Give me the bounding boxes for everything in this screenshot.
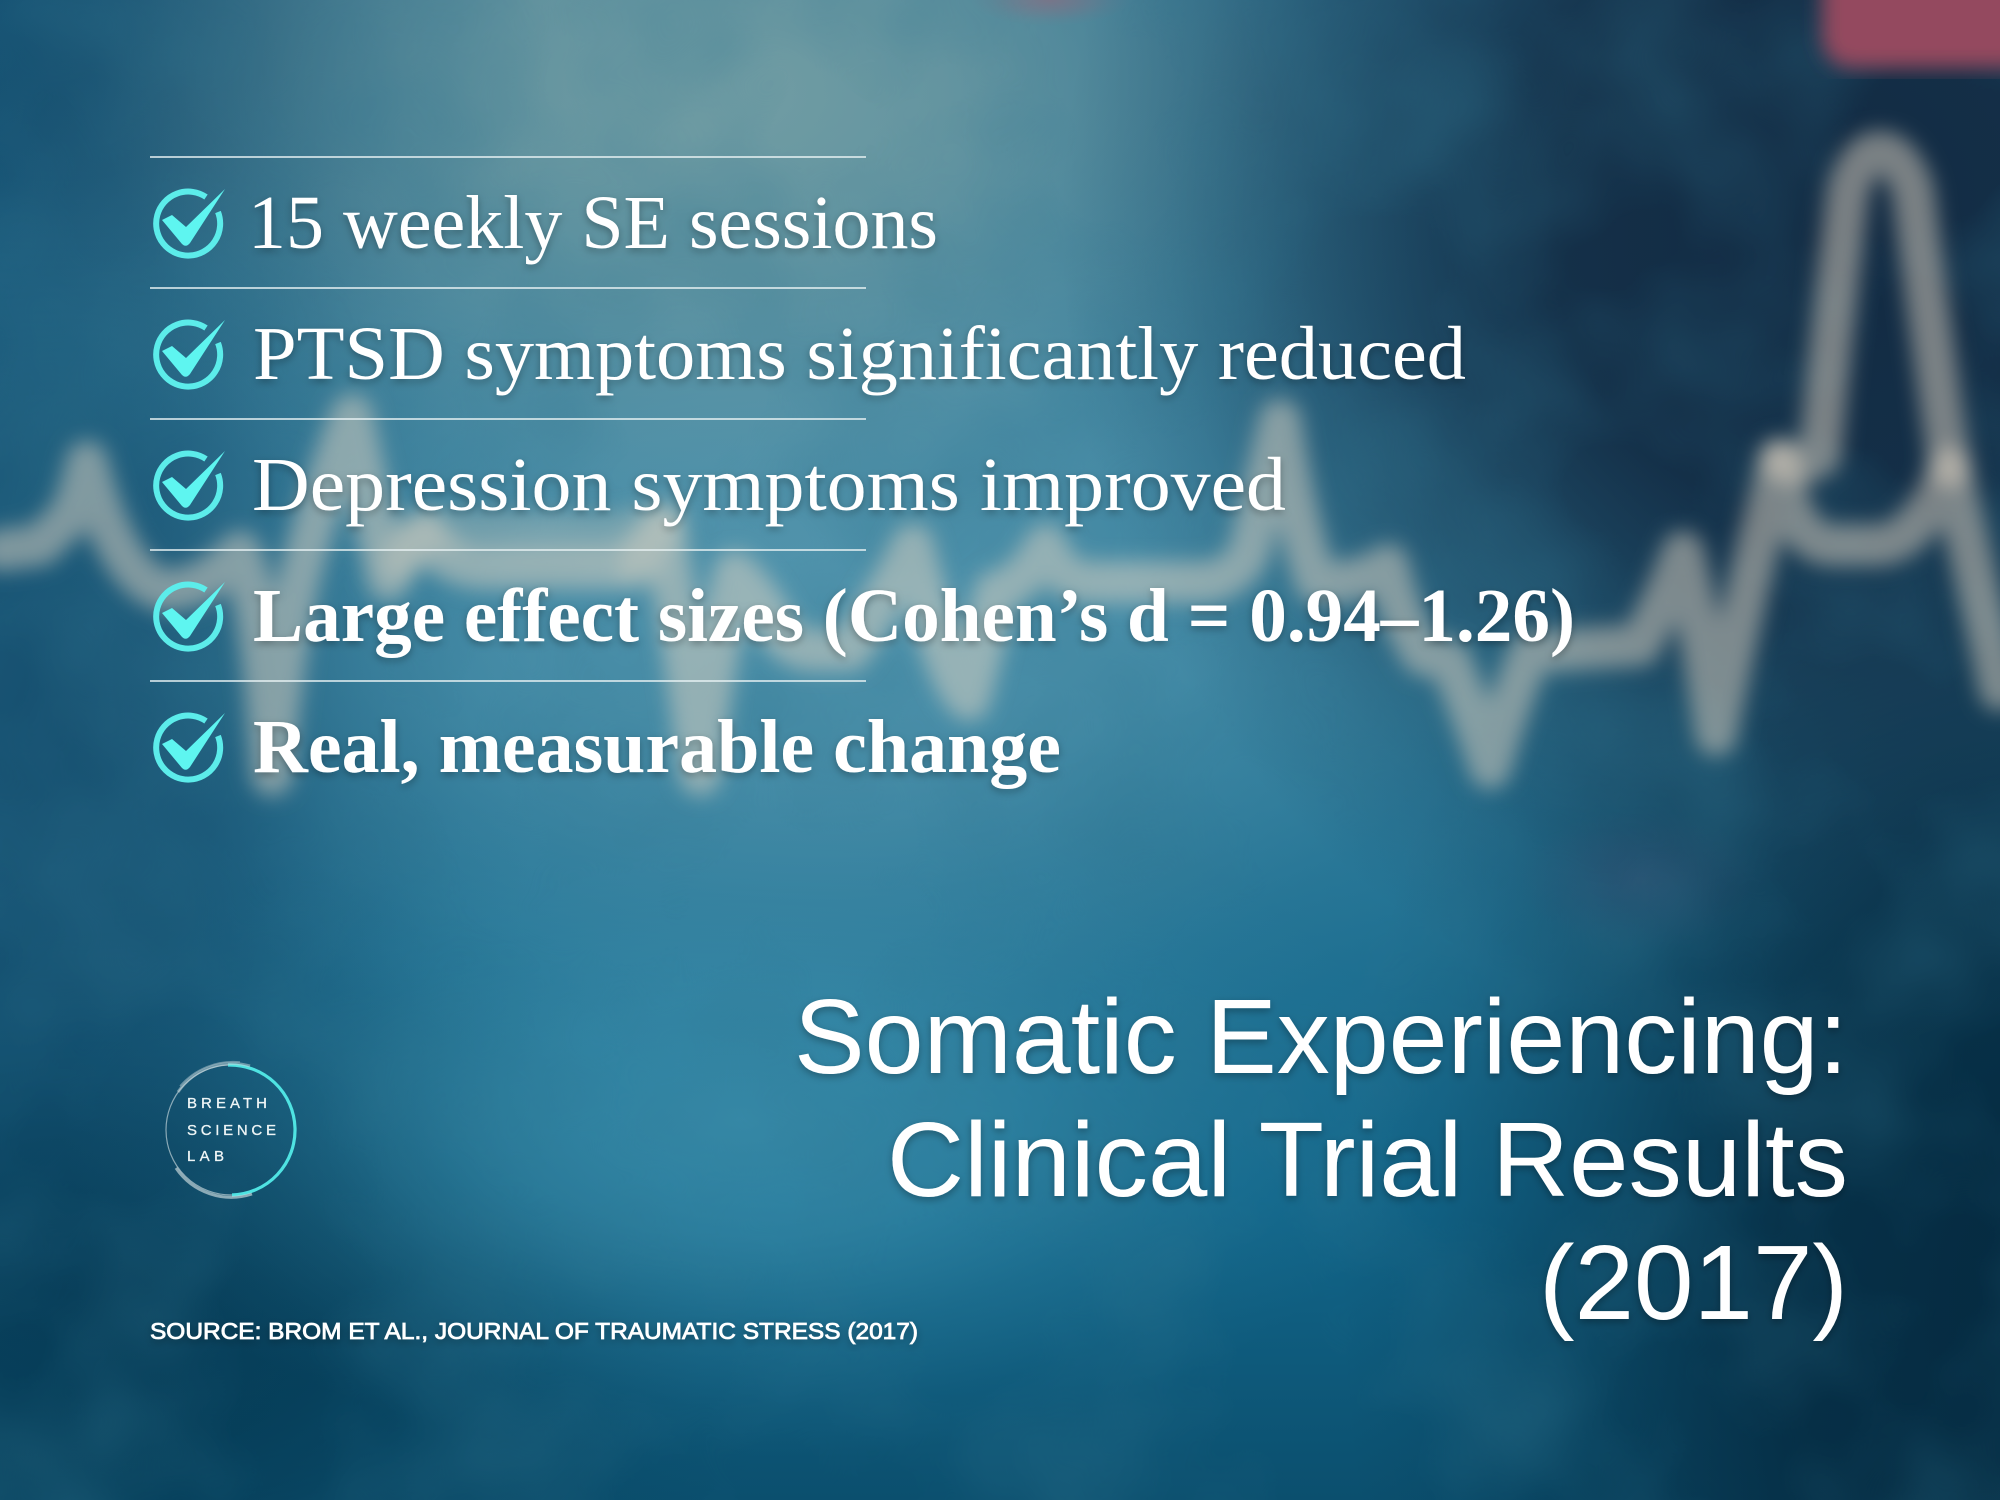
icon: check 5 [156, 713, 225, 780]
checklist [150, 157, 1575, 789]
icon: check 3 [156, 451, 225, 518]
title: Somatic Experiencing: [794, 978, 1848, 1096]
logo: Breath Science Lab [166, 1062, 295, 1197]
item 3: Depression symptoms improved [252, 443, 1286, 527]
title [794, 978, 1848, 1342]
item 1: 15 weekly SE sessions [248, 181, 938, 265]
source line: SOURCE: BROM ET AL., JOURNAL OF TRAUMATIC STRESS (2017) [150, 1318, 918, 1344]
title: Clinical Trial Results [887, 1101, 1848, 1219]
icon: check 1 [156, 189, 225, 256]
icon: check 4 [156, 582, 225, 649]
icon: check 2 [156, 320, 225, 387]
logo: Breath Science Lab: BREATH [187, 1095, 267, 1112]
red monitor indicator [1822, 0, 2000, 68]
logo: Breath Science Lab: SCIENCE [187, 1122, 276, 1139]
item 4: Large effect sizes (Cohen’s d = 0.94–1.26) [253, 574, 1575, 658]
rule lines [150, 157, 866, 681]
item 2: PTSD symptoms significantly reduced [253, 312, 1466, 396]
ECG trace [0, 152, 2000, 775]
logo: Breath Science Lab: LAB [187, 1148, 224, 1165]
item 5: Real, measurable change [253, 705, 1061, 789]
title: (2017) [1539, 1224, 1848, 1342]
